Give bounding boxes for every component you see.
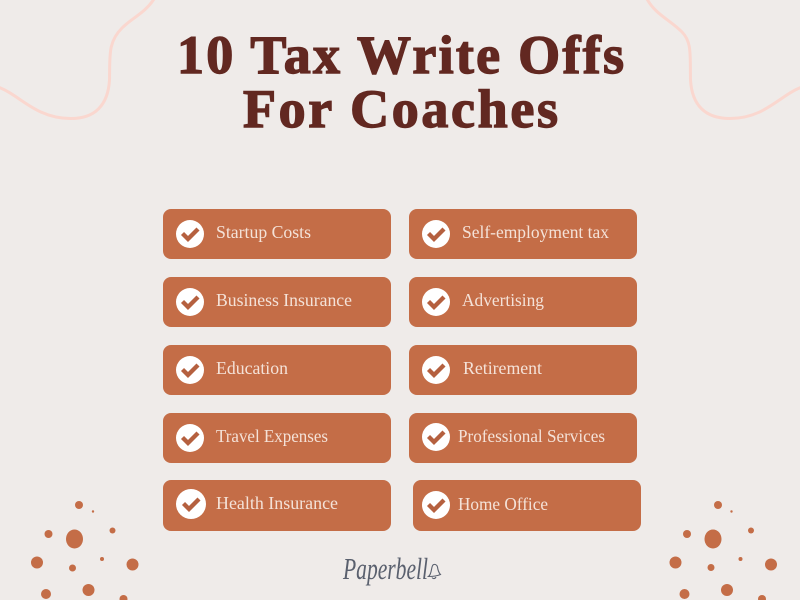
item: Self-employment tax: Self-employment tax	[462, 222, 609, 242]
item: Startup Costs	[163, 209, 391, 259]
item: Self-employment tax	[409, 209, 637, 259]
item: Travel Expenses	[163, 413, 391, 463]
item: Business Insurance: Business Insurance	[216, 290, 352, 310]
item: Education: Education	[216, 358, 288, 378]
item: Advertising	[409, 277, 637, 327]
logo: Paperbell: Paperbell	[342, 551, 428, 586]
top-right decorative curve	[647, 0, 800, 118]
title: For Coaches	[243, 79, 558, 139]
icon: bell	[428, 564, 440, 579]
item: Retirement	[409, 345, 637, 395]
item: Health Insurance	[163, 480, 391, 531]
item: Professional Services: Professional Services	[458, 426, 605, 446]
top-left decorative curve	[0, 0, 154, 119]
title: 10 Tax Write Offs	[177, 25, 624, 85]
item: Advertising: Advertising	[462, 290, 544, 310]
item: Professional Services	[409, 413, 637, 463]
bottom-left dots	[31, 501, 138, 600]
item: Home Office	[413, 480, 641, 531]
item: Retirement: Retirement	[463, 358, 542, 378]
item: Travel Expenses: Travel Expenses	[216, 426, 328, 446]
item: Education	[163, 345, 391, 395]
item: Business Insurance	[163, 277, 391, 327]
item: Home Office: Home Office	[458, 494, 548, 514]
item: Startup Costs: Startup Costs	[216, 222, 311, 242]
title	[177, 25, 624, 139]
item: Health Insurance: Health Insurance	[216, 493, 338, 513]
bottom-right dots	[670, 501, 777, 600]
